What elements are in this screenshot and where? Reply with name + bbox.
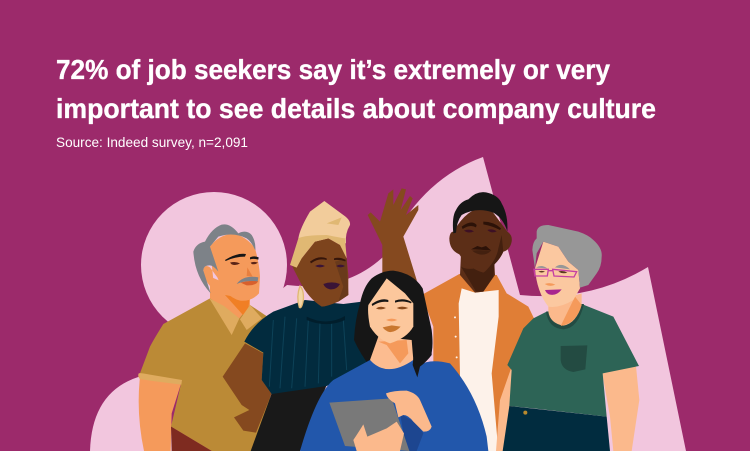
person: man in orange jacket	[422, 192, 534, 451]
source note: Source: Indeed survey, n=2,091	[56, 134, 248, 150]
title: 72% of job seekers say it’s extremely or very	[56, 54, 610, 85]
title: important to see details about company culture	[56, 93, 656, 124]
person: woman in green shirt with glasses	[496, 225, 639, 451]
person: man in tan shirt	[138, 224, 270, 451]
title	[56, 54, 656, 124]
person: woman in blue sweater with tablet	[300, 271, 488, 451]
background pink shapes	[90, 157, 686, 451]
person: woman in dark sweater with raised hand	[223, 188, 420, 451]
